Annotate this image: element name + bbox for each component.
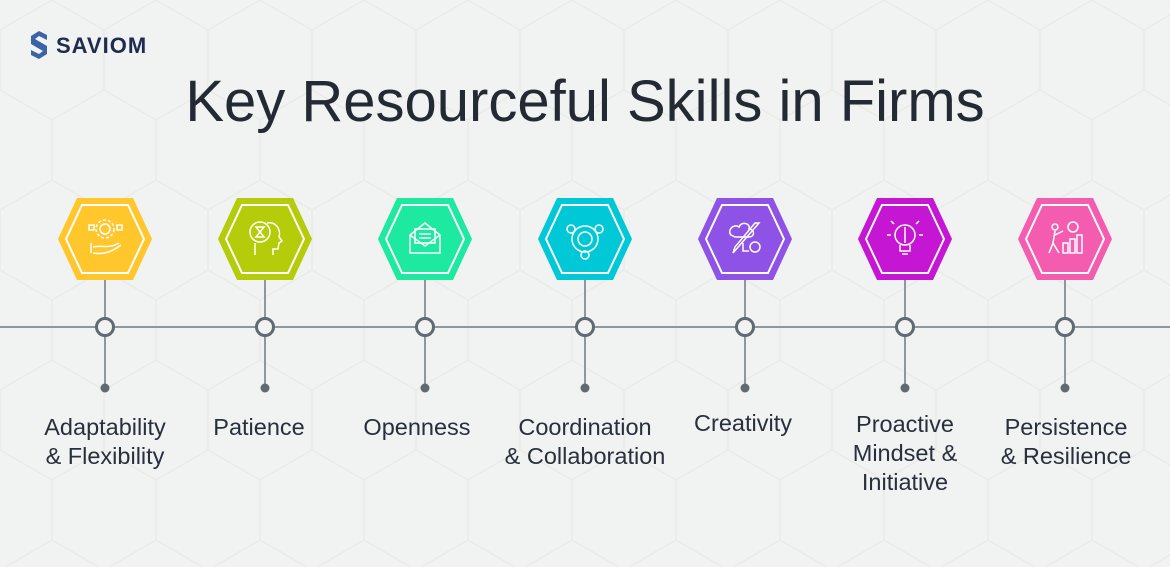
label: Persistence: & Resilience <box>1001 443 1131 469</box>
label: Proactive: Proactive <box>856 411 954 437</box>
label: Coordination: Coordination <box>518 414 652 440</box>
icon: openness <box>378 198 472 280</box>
icon: adaptability <box>58 198 152 280</box>
label: Adaptability <box>44 414 166 469</box>
label: Persistence: Persistence <box>1005 414 1127 440</box>
title: Key Resourceful Skills in Firms <box>185 69 985 134</box>
label: Coordination: & Collaboration <box>505 443 665 469</box>
label: Proactive: Initiative <box>862 469 948 495</box>
label: Openness: Openness <box>363 414 471 440</box>
icon: patience <box>218 198 312 280</box>
label: Creativity: Creativity <box>694 410 792 436</box>
icon: creativity <box>698 198 792 280</box>
label: Proactive: Mindset & <box>853 440 957 466</box>
label: Proactive <box>853 411 957 495</box>
icon: proactive <box>858 198 952 280</box>
label: Persistence <box>1001 414 1131 469</box>
label: Coordination <box>505 414 665 469</box>
icon: persistence <box>1018 198 1112 280</box>
label: Adaptability: Adaptability <box>44 414 166 440</box>
logo: SAVIOM <box>56 33 147 58</box>
icon: coordination <box>538 198 632 280</box>
label: Adaptability: & Flexibility <box>46 443 164 469</box>
label: Patience: Patience <box>213 414 305 440</box>
